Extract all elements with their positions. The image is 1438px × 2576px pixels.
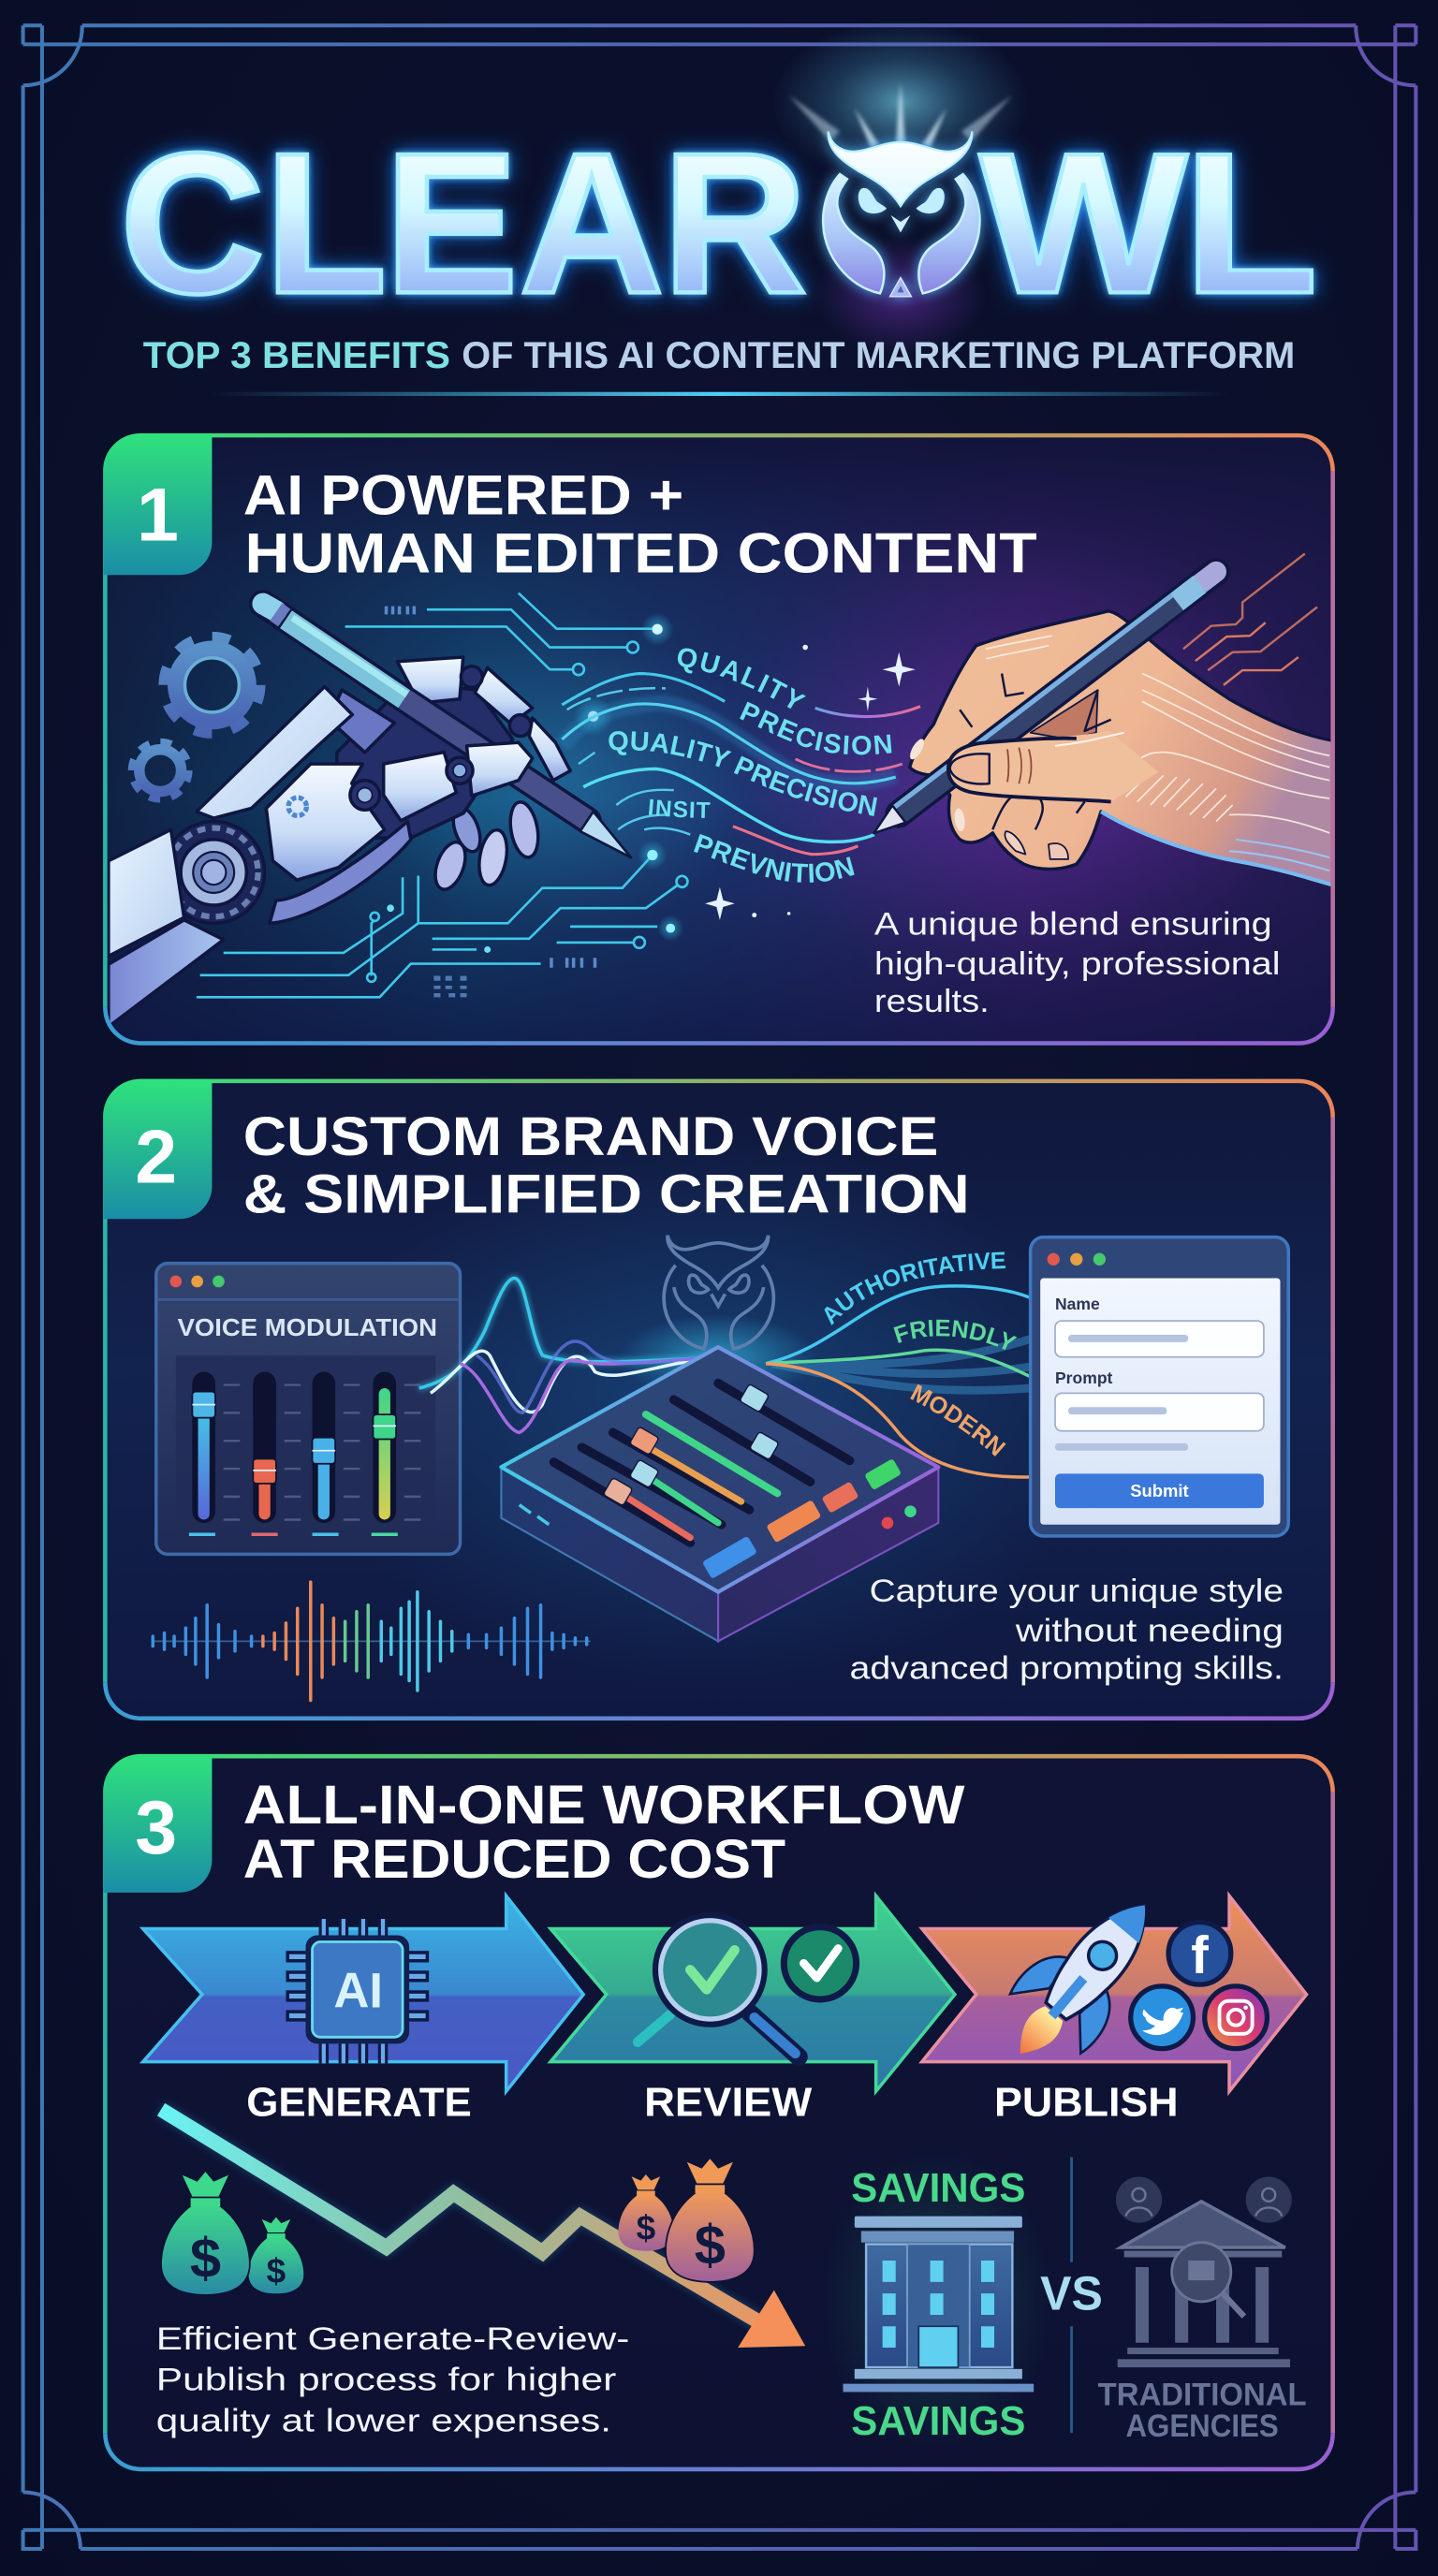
title letters WL: WL bbox=[979, 110, 1318, 335]
audio waveform bbox=[153, 1582, 590, 1701]
icon: AI chip: AI bbox=[333, 1964, 383, 2019]
title: CLEAROWL wordmark bbox=[120, 20, 1318, 355]
hand skin lines bbox=[986, 636, 1329, 833]
icon: twitter bbox=[1131, 1986, 1193, 2049]
icon: instagram bbox=[1205, 1986, 1267, 2049]
heading 2 bbox=[243, 1106, 970, 1224]
slider tracks bbox=[554, 1383, 850, 1543]
voice modulation window: VOICE MODULATION bbox=[178, 1313, 437, 1341]
icon: magnifier with check bbox=[638, 1917, 857, 2056]
card border bbox=[105, 1081, 1333, 1719]
robot lower fingers bbox=[430, 800, 542, 893]
workflow labels: GENERATE bbox=[246, 2080, 472, 2126]
circuit lines bbox=[197, 593, 687, 997]
tone labels: AUTHORITATIVE bbox=[824, 1252, 1005, 1325]
body text 2: advanced prompting skills. bbox=[850, 1651, 1284, 1687]
robot wrist plate bbox=[197, 687, 352, 818]
heading 1 bbox=[243, 462, 1037, 585]
robot upper fingers bbox=[397, 657, 463, 703]
slider handles bbox=[603, 1383, 779, 1506]
robot forearm bbox=[109, 920, 224, 1027]
body text 1: high-quality, professional bbox=[874, 946, 1280, 982]
body text 2: without needing bbox=[1015, 1613, 1284, 1648]
owl backlight glow bbox=[772, 20, 1029, 355]
console buttons bbox=[520, 1458, 917, 1579]
robot pen bbox=[263, 604, 631, 857]
tone labels: FRIENDLY bbox=[893, 1320, 1017, 1350]
form window: Name bbox=[1055, 1295, 1100, 1313]
workflow arrow: publish bbox=[922, 1874, 1307, 2091]
flowing words: QUALITY bbox=[678, 648, 806, 710]
icon: office building bbox=[844, 2217, 1034, 2392]
panel 1: AI powered + human edited content bbox=[103, 432, 1335, 1046]
input waveform bbox=[419, 1278, 718, 1432]
body text 1: A unique blend ensuring bbox=[874, 907, 1272, 943]
heading 3: ALL-IN-ONE WORKFLOW bbox=[243, 1775, 965, 1836]
flowing words: INSIT bbox=[649, 799, 711, 818]
body text 3: quality at lower expenses. bbox=[156, 2404, 611, 2439]
coral accent lines bbox=[1183, 553, 1317, 685]
VS label: VS bbox=[1040, 2267, 1103, 2320]
body text 2: Capture your unique style bbox=[870, 1573, 1284, 1609]
icon: traditional agency temple bbox=[1116, 2177, 1292, 2367]
body text 3: Publish process for higher bbox=[156, 2363, 616, 2398]
workflow arrow: review bbox=[550, 1895, 955, 2091]
number badge 3 bbox=[104, 1754, 212, 1893]
workflow labels: REVIEW bbox=[644, 2080, 813, 2126]
traditional agencies label: AGENCIES bbox=[1125, 2408, 1279, 2444]
human pen bbox=[873, 572, 1216, 833]
number badge 1: 1 bbox=[137, 473, 179, 557]
heading 2: CUSTOM BRAND VOICE bbox=[243, 1106, 938, 1167]
subtitle: TOP 3 BENEFITS bbox=[143, 335, 450, 376]
form window bbox=[1031, 1237, 1288, 1536]
heading 3: AT REDUCED COST bbox=[243, 1829, 785, 1890]
icon: gears bbox=[131, 637, 260, 799]
voice modulation window bbox=[156, 1264, 461, 1554]
icon: owl logo bbox=[823, 131, 980, 297]
number badge 2: 2 bbox=[135, 1116, 177, 1200]
robot palm bbox=[266, 764, 385, 880]
fader tick marks bbox=[224, 1385, 420, 1519]
falling cost trend arrow bbox=[161, 2110, 805, 2348]
number badge 2 bbox=[104, 1079, 212, 1219]
owl outline icon bbox=[664, 1236, 773, 1349]
icon: orange money bags: $ bbox=[695, 2214, 726, 2276]
mixing console bbox=[501, 1347, 938, 1641]
number badge 1 bbox=[104, 433, 212, 575]
heading 1: AI POWERED + bbox=[243, 462, 683, 526]
body text 1: results. bbox=[874, 984, 990, 1019]
workflow labels: PUBLISH bbox=[994, 2080, 1179, 2126]
flowing wave lines bbox=[562, 674, 920, 855]
icon: green money bags: $ bbox=[267, 2251, 286, 2290]
body text 3: Efficient Generate-Review- bbox=[156, 2321, 629, 2357]
faders bbox=[189, 1372, 398, 1534]
icon: orange money bags bbox=[618, 2159, 755, 2282]
traditional agencies label bbox=[1098, 2377, 1307, 2444]
human thumb bbox=[948, 731, 1159, 801]
card border bbox=[105, 435, 1333, 1043]
heading 1: HUMAN EDITED CONTENT bbox=[245, 521, 1037, 585]
heading 2: & SIMPLIFIED CREATION bbox=[243, 1164, 970, 1224]
icon: green money bags: $ bbox=[190, 2227, 221, 2290]
form window: Prompt bbox=[1055, 1368, 1113, 1387]
title letters CLEAR: CLEAR bbox=[120, 111, 807, 335]
body text 1 bbox=[874, 907, 1280, 1019]
workflow arrow: generate bbox=[143, 1895, 583, 2091]
savings label bottom: SAVINGS bbox=[851, 2398, 1025, 2444]
flowing words bbox=[609, 648, 891, 883]
panel 2: custom brand voice bbox=[103, 1078, 1335, 1758]
flowing words: PREVNITION bbox=[694, 834, 855, 883]
icon: orange money bags: $ bbox=[637, 2209, 656, 2247]
icon: facebook bbox=[1168, 1922, 1231, 1984]
icon: AI chip bbox=[286, 1919, 429, 2063]
icon: green money bags bbox=[161, 2172, 303, 2295]
number badge 3: 3 bbox=[135, 1786, 177, 1870]
robot hand bbox=[109, 604, 631, 1027]
body text 3 bbox=[156, 2321, 629, 2439]
tone ribbons bbox=[766, 1286, 1031, 1477]
glowing nodes bbox=[387, 613, 683, 997]
tone labels bbox=[824, 1252, 1017, 1456]
flowing words: QUALITY PRECISION bbox=[609, 731, 877, 816]
heading 3 bbox=[243, 1775, 965, 1890]
sparkles bbox=[705, 645, 916, 920]
savings label top: SAVINGS bbox=[851, 2165, 1025, 2211]
robot front fingers bbox=[384, 752, 456, 821]
panel 3: all-in-one workflow bbox=[104, 1754, 1334, 2471]
subtitle: OF THIS AI CONTENT MARKETING PLATFORM bbox=[462, 335, 1295, 376]
comparison divider bbox=[1071, 2157, 1073, 2433]
form window: Submit bbox=[1130, 1481, 1189, 1500]
body text 2 bbox=[850, 1573, 1284, 1687]
human hand bbox=[873, 572, 1334, 886]
flowing words: PRECISION bbox=[740, 702, 891, 754]
icon: rocket bbox=[983, 1874, 1182, 2086]
tone labels: MODERN bbox=[910, 1383, 1005, 1456]
robot dark mechanics bbox=[337, 681, 513, 838]
card border bbox=[105, 1756, 1333, 2469]
traditional agencies label: TRADITIONAL bbox=[1098, 2377, 1307, 2412]
icon: facebook: f bbox=[1191, 1925, 1209, 1984]
workflow labels bbox=[246, 2080, 1179, 2126]
